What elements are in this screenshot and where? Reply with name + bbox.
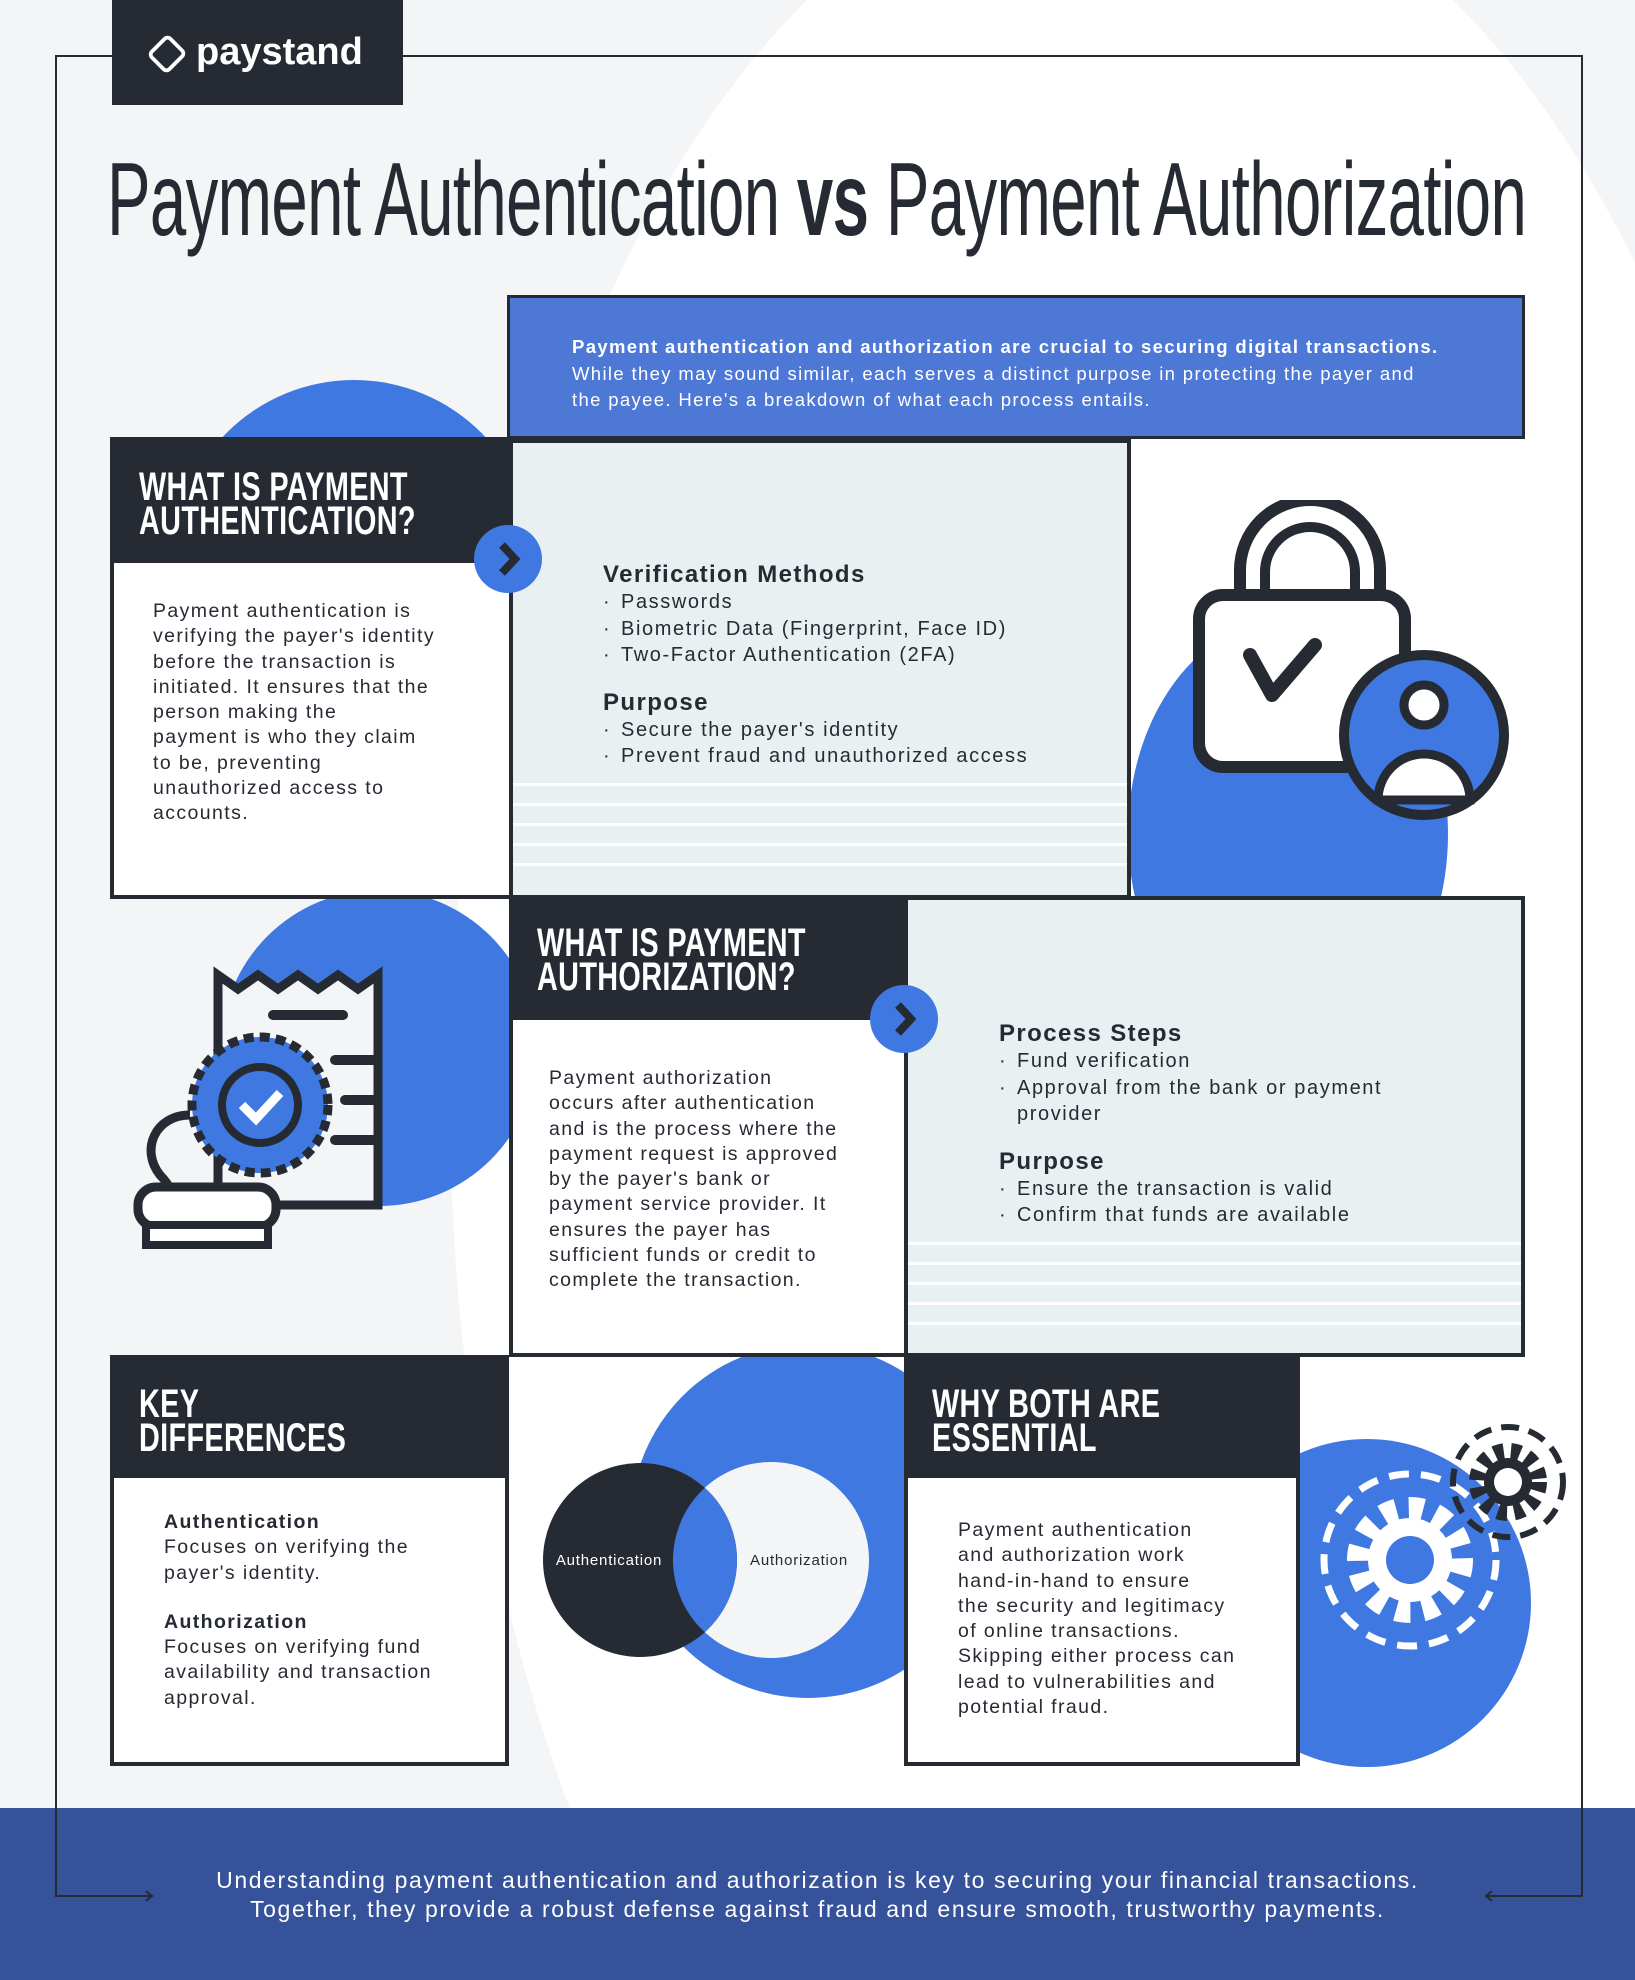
footer: Understanding payment authentication and authorization is key to securing your financial transactions. [216, 1867, 1419, 1893]
arrow: chevron 2 [870, 985, 938, 1053]
arrow: chevron 1 [474, 525, 542, 593]
panel: authorization text: ensures the payer has [549, 1219, 771, 1241]
title: Payment Authentication vs Payment Authorization [107, 142, 1526, 258]
panel: why both text: Payment authentication [958, 1519, 1193, 1541]
panel: authentication heading [110, 437, 509, 563]
logo [112, 0, 403, 105]
panel: key differences heading: DIFFERENCES [139, 1416, 346, 1460]
footer [0, 1808, 1635, 1980]
panel: authorization heading: WHAT IS PAYMENT [537, 921, 806, 965]
panel: key differences heading: KEY [139, 1382, 199, 1426]
frame lines in footer with arrows [55, 1808, 1583, 1902]
panel: authentication heading: AUTHENTICATION? [139, 499, 416, 543]
panel: key differences text: Focuses on verifying fund [164, 1636, 421, 1658]
panel: authorization details: Confirm that funds are available [1017, 1204, 1351, 1226]
panel: why both text: of online transactions. [958, 1620, 1180, 1642]
icon: lock with user [1193, 500, 1509, 820]
panel: authentication details: Passwords [621, 591, 733, 613]
panel: key differences text [110, 1474, 509, 1766]
chart: venn diagram: Authentication [556, 1552, 662, 1569]
chart: venn diagram [543, 1357, 904, 1698]
right blob lock [1131, 661, 1448, 896]
panel: why both heading: ESSENTIAL [932, 1416, 1097, 1460]
panel: authentication text: to be, preventing [153, 752, 322, 774]
panel: key differences text: availability and transaction [164, 1661, 432, 1683]
intro box: Payment authentication and authorization are crucial to securing digital transactions. [572, 336, 1439, 357]
panel: authorization heading: AUTHORIZATION? [537, 955, 796, 999]
panel: authorization text: occurs after authentication [549, 1092, 816, 1114]
panel: key differences heading [110, 1355, 509, 1478]
panel: authorization text: and is the process where the [549, 1118, 838, 1140]
panel: authorization details: Approval from the bank or payment [1017, 1076, 1382, 1098]
panel: key differences text: payer's identity. [164, 1562, 321, 1584]
gear blob [1300, 1439, 1531, 1767]
panel: authorization text: sufficient funds or credit to [549, 1244, 817, 1266]
intro box [507, 295, 1525, 439]
panel: authorization details: provider [1017, 1103, 1102, 1125]
panel: authentication text: unauthorized access to [153, 777, 384, 799]
panel: why both text: Skipping either process can [958, 1645, 1235, 1667]
panel: authentication details: Purpose [603, 688, 709, 716]
panel: authentication heading: WHAT IS PAYMENT [139, 465, 408, 509]
panel: authentication details: Prevent fraud and unauthorized access [621, 745, 1028, 767]
panel: why both text: lead to vulnerabilities and [958, 1671, 1216, 1693]
icon: gears [1320, 1424, 1566, 1650]
panel: authentication text: accounts. [153, 802, 249, 824]
panel: why both text [904, 1474, 1300, 1766]
panel: authentication details: Biometric Data (Fingerprint, Face ID) [621, 618, 1007, 640]
panel: authorization text: payment service provider. It [549, 1193, 827, 1215]
panel: authentication text: payment is who they claim [153, 726, 417, 748]
panel: authentication details: Two-Factor Authentication (2FA) [621, 644, 956, 666]
panel: authorization text: payment request is approved [549, 1143, 838, 1165]
panel: authentication details [509, 439, 1131, 899]
panel: authorization heading [509, 896, 904, 1020]
chart: venn diagram: Authorization [750, 1552, 848, 1569]
panel: why both text: potential fraud. [958, 1696, 1109, 1718]
panel: why both heading [904, 1355, 1300, 1478]
panel: authentication text: verifying the payer's identity [153, 625, 435, 647]
panel: authorization details: Process Steps [999, 1020, 1183, 1047]
panel: authorization details: Ensure the transaction is valid [1017, 1178, 1333, 1200]
panel: authentication details: Verification Methods [603, 561, 866, 588]
panel: authentication text: before the transaction is [153, 651, 396, 673]
panel: authorization details: Purpose [999, 1148, 1105, 1174]
panel: key differences text: approval. [164, 1687, 257, 1709]
panel: key differences text: Authorization [164, 1611, 308, 1633]
intro box: the payee. Here's a breakdown of what each process entails. [572, 389, 1151, 410]
panel: authorization text [509, 1016, 908, 1357]
panel: why both heading: WHY BOTH ARE [932, 1382, 1160, 1426]
panel: authentication text [110, 559, 513, 899]
panel: authentication text: Payment authentication is [153, 600, 411, 622]
intro box: While they may sound similar, each serves a distinct purpose in protecting the payer and [572, 362, 1415, 384]
panel: authorization details: Fund verification [1017, 1050, 1191, 1072]
panel: authorization details [904, 896, 1525, 1357]
panel: key differences text: Authentication [164, 1511, 320, 1533]
footer: Together, they provide a robust defense against fraud and ensure smooth, trustworthy payments. [250, 1896, 1385, 1922]
panel: why both text: the security and legitimacy [958, 1595, 1226, 1617]
panel: authorization text: Payment authorization [549, 1067, 772, 1089]
panel: authentication text: initiated. It ensures that the [153, 676, 429, 698]
panel: authentication details: Secure the payer's identity [621, 718, 899, 740]
panel: key differences text: Focuses on verifying the [164, 1536, 409, 1558]
panel: why both text: hand-in-hand to ensure [958, 1570, 1190, 1592]
panel: authorization text: by the payer's bank or [549, 1168, 771, 1190]
icon: approval stamp document [134, 966, 382, 1249]
panel: authentication text: person making the [153, 701, 337, 723]
panel: authorization text: complete the transaction. [549, 1269, 802, 1291]
panel: why both text: and authorization work [958, 1544, 1185, 1566]
logo: paystand [196, 31, 363, 73]
